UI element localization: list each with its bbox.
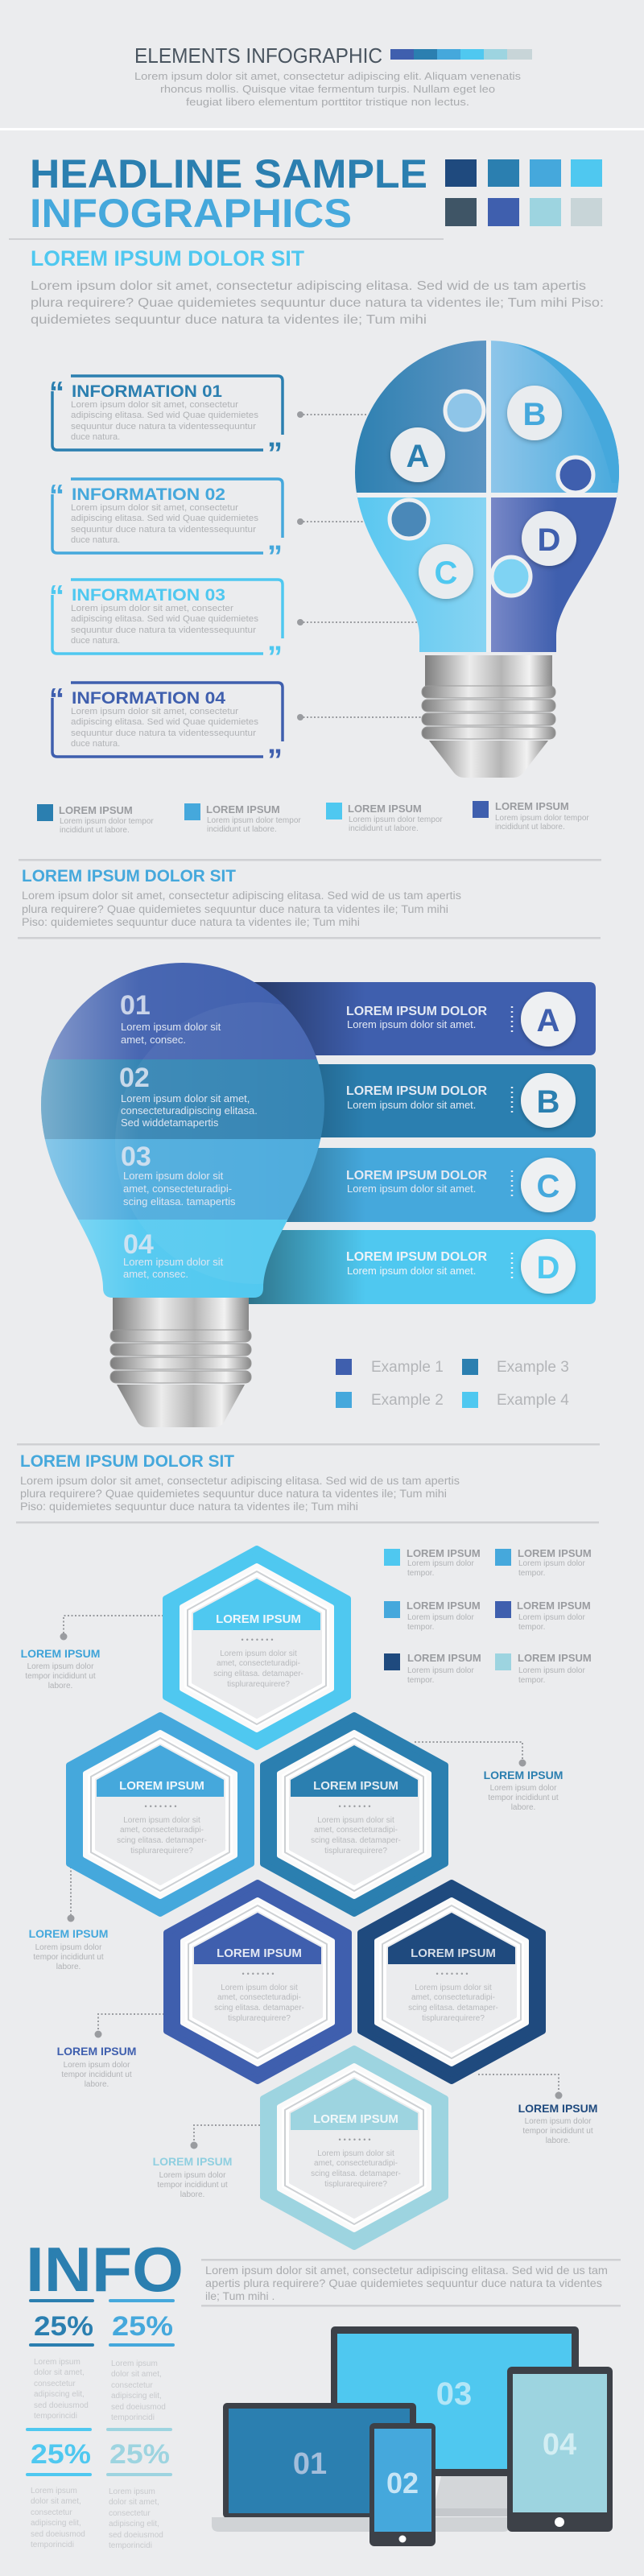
bulb numbers and text: amet, consecteturadipi-	[123, 1183, 232, 1195]
hex side labels: labore.	[180, 2190, 204, 2199]
stat 3: dolor sit amet,	[31, 2497, 81, 2506]
hexagon legend grid: Lorem ipsum dolor	[407, 1613, 474, 1622]
devices illustration	[212, 2326, 613, 2546]
header subtext: Lorem ipsum dolor sit amet, consectetur adipiscing elit. Aliquam venenatis	[134, 70, 522, 82]
hex side labels: LOREM IPSUM	[29, 1927, 108, 1940]
hexagon legend grid: tempor.	[518, 1676, 545, 1685]
legend: examples	[336, 1359, 569, 1409]
legend row 1: LOREM IPSUM	[348, 803, 422, 815]
bulb numbers and text: Sed widdetamapertis	[121, 1117, 219, 1129]
bar C: LOREM IPSUM DOLOR	[346, 1169, 488, 1183]
bulb numbers and text: amet, consec.	[121, 1034, 186, 1046]
info box 04: “	[49, 683, 64, 716]
hexagon 6: LOREM IPSUM	[313, 2112, 398, 2126]
header subtext: rhoncus mollis. Quisque vitae fermentum turpis. Nullam eget leo	[160, 83, 495, 95]
info box 02: duce natura.	[71, 535, 120, 545]
info box 04: ”	[267, 744, 283, 778]
hex side labels: tempor incididunt ut	[488, 1794, 559, 1802]
info box 02: adipiscing elitasa. Sed wid Quae quidemietes	[71, 514, 259, 523]
info paragraph: ile; Tum mihi .	[205, 2289, 275, 2302]
stat 4: dolor sit amet,	[109, 2498, 159, 2507]
layered lightbulb	[41, 963, 324, 1427]
stat 1: consectetur	[34, 2380, 76, 2388]
main headline: INFOGRAPHICS	[30, 191, 352, 236]
hex side labels: Lorem ipsum dolor	[64, 2061, 130, 2070]
hexagon 1: scing elitasa. detamaper-	[213, 1670, 303, 1678]
info box 01: INFORMATION 01	[72, 382, 222, 401]
legend: examples: Example 1	[371, 1359, 444, 1376]
stat 2: 25%	[112, 2311, 173, 2342]
hexagon 5: amet, consecteturadipi-	[411, 1993, 495, 2002]
hex side labels: LOREM IPSUM	[153, 2155, 232, 2168]
stat 3: sed doeiusmod	[31, 2530, 85, 2539]
info box 02: ”	[267, 540, 283, 574]
hexagon legend grid: LOREM IPSUM	[407, 1547, 481, 1559]
info box 01: duce natura.	[71, 432, 120, 442]
phone: 02	[386, 2467, 419, 2500]
hexagon legend grid: tempor.	[518, 1623, 545, 1632]
hex side labels: labore.	[85, 2080, 109, 2089]
hexagon 5: Lorem ipsum dolor sit	[415, 1984, 492, 1992]
hexagon 6: •••••••	[338, 2136, 374, 2144]
legend row 1: Lorem ipsum dolor tempor	[207, 816, 301, 825]
hex side labels: tempor incididunt ut	[25, 1672, 96, 1681]
hexagon 5: scing elitasa. detamaper-	[408, 2004, 498, 2013]
bulb numbers and text: 01	[120, 990, 151, 1021]
info paragraph	[201, 2259, 621, 2307]
hexagon 3: tisplurarequirere?	[324, 1847, 387, 1856]
section 1 paragraph: Lorem ipsum dolor sit amet, consectetur adipiscing elitasa. Sed wid de us tam apertis	[31, 279, 586, 293]
stat 4: sed doeiusmod	[109, 2531, 163, 2540]
stat 1: 25%	[34, 2311, 93, 2342]
hexagon 3: scing elitasa. detamaper-	[311, 1836, 401, 1845]
legend row 1: incididunt ut labore.	[349, 824, 419, 833]
hex side labels: Lorem ipsum dolor	[525, 2117, 592, 2126]
legend row 1: incididunt ut labore.	[60, 826, 130, 835]
section 2 paragraph	[22, 890, 461, 928]
hex side labels	[21, 1647, 597, 2199]
info paragraph: Lorem ipsum dolor sit amet, consectetur adipiscing elitasa. Sed wid de us tam	[205, 2264, 608, 2277]
metal base	[422, 655, 555, 778]
section 1 heading: LOREM IPSUM DOLOR SIT	[31, 246, 304, 270]
info box 02: “	[49, 479, 64, 513]
tablet: 04	[543, 2428, 576, 2462]
info box 01: Lorem ipsum dolor sit amet, consectetur	[71, 400, 238, 410]
puzzle lightbulb: B	[523, 397, 546, 432]
hexagon 6: tisplurarequirere?	[324, 2180, 387, 2189]
info box 03: Lorem ipsum dolor sit amet, consecter	[71, 604, 233, 613]
puzzle lightbulb	[346, 330, 628, 778]
hexagon legend grid	[384, 1547, 592, 1685]
info box 03: ”	[267, 641, 283, 675]
hexagon 6: Lorem ipsum dolor sit	[317, 2149, 394, 2158]
section 2 paragraph: Piso: quidemietes sequuntur duce natura ta videntes ile; Tum mihi	[22, 916, 360, 928]
bar B: LOREM IPSUM DOLOR	[346, 1084, 488, 1098]
hexagon legend grid: Lorem ipsum dolor	[407, 1559, 474, 1568]
hexagon 4: Lorem ipsum dolor sit	[221, 1984, 298, 1992]
info box 02: sequuntur duce natura ta videntessequuntur	[71, 525, 256, 535]
info box 03: sequuntur duce natura ta videntessequuntur	[71, 625, 256, 635]
stat 4	[106, 2428, 172, 2550]
bar D	[242, 1230, 596, 1304]
hexagon legend grid: Lorem ipsum dolor	[407, 1666, 474, 1675]
hexagon legend grid: tempor.	[407, 1569, 434, 1578]
info box 04: sequuntur duce natura ta videntessequuntur	[71, 729, 256, 738]
info box 03: duce natura.	[71, 636, 120, 646]
info box 03: INFORMATION 03	[72, 586, 225, 605]
stat 2: Lorem ipsum	[111, 2359, 158, 2368]
monitor	[331, 2326, 579, 2516]
bar A: Lorem ipsum dolor sit amet.	[347, 1018, 476, 1030]
bulb numbers and text: 04	[123, 1229, 154, 1260]
info box 04: INFORMATION 04	[72, 689, 225, 708]
section 3 paragraph	[20, 1475, 460, 1513]
info box 01: sequuntur duce natura ta videntessequuntur	[71, 422, 256, 431]
section 2 paragraph: plura requirere? Quae quidemietes sequuntur duce natura ta videntes ile; Tum mihi	[22, 903, 448, 915]
bar D: Lorem ipsum dolor sit amet.	[347, 1265, 476, 1277]
legend: examples: Example 3	[497, 1359, 569, 1376]
stat 4: temporincidi	[109, 2541, 152, 2550]
hexagon 4: LOREM IPSUM	[217, 1946, 302, 1960]
section 2 paragraph: Lorem ipsum dolor sit amet, consectetur adipiscing elitasa. Sed wid de us tam apertis	[22, 890, 461, 902]
section 3 paragraph: Piso: quidemietes sequuntur duce natura ta videntes ile; Tum mihi	[20, 1501, 358, 1513]
hexagon legend grid: LOREM IPSUM	[517, 1600, 591, 1612]
hexagon 4	[167, 1883, 349, 2081]
bulb numbers and text: 03	[121, 1141, 151, 1172]
hexagon 2: scing elitasa. detamaper-	[117, 1836, 207, 1845]
info box 01: “	[49, 376, 64, 410]
hexagon 3: Lorem ipsum dolor sit	[317, 1816, 394, 1825]
info box 04: Lorem ipsum dolor sit amet, consectetur	[71, 707, 238, 716]
info box 01: adipiscing elitasa. Sed wid Quae quidemietes	[71, 411, 259, 420]
info box 04	[49, 683, 283, 778]
header: elements infographic: ELEMENTS INFOGRAPHIC	[134, 43, 382, 68]
section 2 heading: LOREM IPSUM DOLOR SIT	[22, 867, 236, 886]
hex side labels: labore.	[48, 1682, 72, 1690]
section 3 heading: LOREM IPSUM DOLOR SIT	[20, 1452, 234, 1471]
stat 4: Lorem ipsum	[109, 2487, 155, 2496]
bulb numbers and text: Lorem ipsum dolor sit	[123, 1256, 224, 1268]
stat 2: dolor sit amet,	[111, 2370, 162, 2379]
bar C: C	[537, 1169, 559, 1204]
puzzle lightbulb: A	[407, 439, 429, 474]
bar D: LOREM IPSUM DOLOR	[346, 1250, 488, 1264]
bar B: B	[537, 1084, 559, 1120]
hexagon 5: tisplurarequirere?	[422, 2014, 485, 2023]
stat 3: temporincidi	[31, 2541, 74, 2549]
INFO title: INFO	[26, 2234, 184, 2305]
piece D	[489, 495, 625, 656]
info box 01	[49, 376, 283, 471]
hexagon 4: scing elitasa. detamaper-	[214, 2004, 304, 2013]
bulb numbers and text: amet, consec.	[123, 1268, 188, 1280]
bar D: D	[537, 1250, 559, 1286]
hexagon 1: •••••••	[241, 1636, 276, 1644]
bar B: Lorem ipsum dolor sit amet.	[347, 1099, 476, 1111]
info paragraph: apertis plura requirere? Quae quidemietes sequuntur duce natura ta videntes	[205, 2277, 602, 2289]
color palette squares	[445, 159, 602, 226]
hexagon 4: tisplurarequirere?	[228, 2014, 291, 2023]
hex side labels: LOREM IPSUM	[484, 1769, 563, 1781]
stat 3: Lorem ipsum	[31, 2487, 77, 2496]
hexagon 2: Lorem ipsum dolor sit	[123, 1816, 200, 1825]
laptop: 01	[293, 2447, 327, 2481]
bulb numbers and text: 02	[119, 1063, 150, 1093]
stat 2: adipiscing elit,	[111, 2392, 162, 2401]
hexagon 6: amet, consecteturadipi-	[314, 2159, 398, 2168]
stat 3: adipiscing elit,	[31, 2519, 81, 2528]
stat 1	[29, 2299, 94, 2421]
bulb numbers and text	[119, 990, 258, 1280]
hexagon legend grid: tempor.	[518, 1569, 545, 1578]
hexagon 2: amet, consecteturadipi-	[120, 1826, 204, 1835]
info box 01: ”	[267, 437, 283, 471]
hexagon legend grid: tempor.	[407, 1676, 434, 1685]
stat 3: 25%	[31, 2439, 91, 2470]
hex side labels: tempor incididunt ut	[61, 2070, 132, 2079]
hexagon 3: •••••••	[338, 1802, 374, 1810]
hexagon legend grid: LOREM IPSUM	[407, 1600, 481, 1612]
knobs	[445, 391, 484, 430]
hexagon 5	[361, 1883, 543, 2081]
laptop	[212, 2403, 510, 2532]
stat 2	[109, 2299, 175, 2422]
color strip	[390, 49, 532, 60]
info box 03	[49, 580, 283, 675]
hex side labels: Lorem ipsum dolor	[159, 2171, 226, 2180]
hexagon 1: Lorem ipsum dolor sit	[220, 1649, 297, 1658]
stat 1: sed doeiusmod	[34, 2401, 89, 2410]
hexagon 4: •••••••	[242, 1970, 277, 1978]
hex side labels: labore.	[511, 1803, 535, 1812]
info box 02	[49, 479, 283, 574]
hexagon 1: LOREM IPSUM	[216, 1612, 301, 1626]
hexagon legend grid: Lorem ipsum dolor	[518, 1613, 585, 1622]
stat 3	[26, 2428, 92, 2549]
section 3 paragraph: plura requirere? Quae quidemietes sequuntur duce natura ta videntes ile; Tum mihi	[20, 1488, 447, 1500]
legend row 1: Lorem ipsum dolor tempor	[349, 815, 443, 824]
hex side labels: Lorem ipsum dolor	[35, 1943, 102, 1952]
hexagon 3: LOREM IPSUM	[313, 1779, 398, 1793]
hexagon legend grid: Lorem ipsum dolor	[518, 1559, 585, 1568]
hexagon 5: •••••••	[436, 1970, 471, 1978]
stat 1: temporincidi	[34, 2412, 77, 2421]
bar B	[242, 1064, 596, 1137]
hex side labels: labore.	[546, 2136, 570, 2145]
legend row 1: LOREM IPSUM	[206, 803, 280, 815]
section 1 paragraph: quidemietes sequuntur duce natura ta videntes ile; Tum mihi	[31, 313, 427, 327]
hexagon 1: amet, consecteturadipi-	[217, 1659, 300, 1668]
info box 04: adipiscing elitasa. Sed wid Quae quidemietes	[71, 717, 259, 727]
legend: examples: Example 2	[371, 1392, 444, 1409]
stat 4: adipiscing elit,	[109, 2520, 159, 2529]
stat 2: temporincidi	[111, 2413, 155, 2422]
connectors to bulb	[297, 411, 423, 720]
hexagon legend grid: LOREM IPSUM	[518, 1652, 592, 1664]
hex side labels: Lorem ipsum dolor	[490, 1784, 557, 1793]
hex connectors	[64, 1616, 559, 2145]
hexagon 3: amet, consecteturadipi-	[314, 1826, 398, 1835]
hexagon 4: amet, consecteturadipi-	[217, 1993, 301, 2002]
info box 02: Lorem ipsum dolor sit amet, consectetur	[71, 503, 238, 513]
hexagon 2: •••••••	[144, 1802, 180, 1810]
bulb numbers and text: Lorem ipsum dolor sit	[123, 1170, 224, 1182]
puzzle lightbulb: D	[538, 522, 560, 558]
hexagon 6	[263, 2049, 445, 2247]
hexagon legend grid: Lorem ipsum dolor	[518, 1666, 585, 1675]
bar A: LOREM IPSUM DOLOR	[346, 1005, 488, 1018]
bar C	[242, 1148, 596, 1222]
bulb numbers and text: Lorem ipsum dolor sit amet,	[121, 1092, 250, 1104]
hexagon 1: tisplurarequirere?	[227, 1680, 290, 1689]
stat 4: consectetur	[109, 2509, 151, 2518]
stat 1: adipiscing elit,	[34, 2390, 85, 2399]
bars A-D	[242, 982, 596, 1304]
hexagon 1	[166, 1549, 348, 1747]
info box 03: adipiscing elitasa. Sed wid Quae quidemietes	[71, 614, 259, 624]
hex side labels: tempor incididunt ut	[157, 2181, 228, 2190]
header subtext: feugiat libero elementum porttitor tristique non lectus.	[186, 96, 469, 108]
info box 02: INFORMATION 02	[72, 485, 225, 504]
hex side labels: tempor incididunt ut	[522, 2127, 593, 2136]
hex side labels: Lorem ipsum dolor	[27, 1662, 94, 1671]
bar A: A	[537, 1003, 559, 1038]
info box 03: “	[49, 580, 64, 613]
stat 1: Lorem ipsum	[34, 2358, 80, 2367]
hexagon 5: LOREM IPSUM	[411, 1946, 496, 1960]
stat 2: consectetur	[111, 2381, 153, 2390]
hexagon legend grid: tempor.	[407, 1623, 434, 1632]
legend row 1: incididunt ut labore.	[495, 823, 565, 832]
hex side labels: LOREM IPSUM	[518, 2102, 597, 2115]
hexagon legend grid: LOREM IPSUM	[407, 1652, 481, 1664]
main headline: HEADLINE SAMPLE	[30, 151, 427, 196]
bulb numbers and text: scing elitasa. tamapertis	[123, 1195, 236, 1208]
section 1 paragraph	[31, 279, 604, 327]
hexagon 6: scing elitasa. detamaper-	[311, 2169, 401, 2178]
bar C: Lorem ipsum dolor sit amet.	[347, 1183, 476, 1195]
legend: examples: Example 4	[497, 1392, 569, 1409]
metal base 2	[110, 1298, 251, 1427]
hexagon legend grid: LOREM IPSUM	[518, 1547, 592, 1559]
legend row 1: LOREM IPSUM	[59, 804, 133, 816]
stat 2: sed doeiusmod	[111, 2403, 166, 2412]
stat 1: dolor sit amet,	[34, 2368, 85, 2377]
hexagon 2: tisplurarequirere?	[130, 1847, 193, 1856]
hex side labels: tempor incididunt ut	[33, 1953, 104, 1962]
piece B	[489, 341, 619, 495]
piece A	[355, 341, 489, 495]
bulb numbers and text: consecteturadipiscing elitasa.	[121, 1104, 258, 1117]
bulb numbers and text: Lorem ipsum dolor sit	[121, 1021, 221, 1033]
letter circles	[390, 386, 576, 599]
hex side labels: LOREM IPSUM	[57, 2045, 136, 2058]
main headline	[30, 151, 427, 236]
stat 3: consectetur	[31, 2508, 72, 2517]
header subtext	[134, 70, 522, 108]
monitor: 03	[436, 2376, 472, 2412]
legend row 1	[37, 800, 589, 835]
hexagon 2	[69, 1715, 251, 1913]
info box 04: duce natura.	[71, 739, 120, 749]
hex side labels: LOREM IPSUM	[21, 1647, 100, 1660]
hex side labels: labore.	[56, 1963, 80, 1971]
stat 4: 25%	[109, 2439, 170, 2470]
bar A	[242, 982, 596, 1055]
tablet	[507, 2367, 613, 2532]
legend row 1: Lorem ipsum dolor tempor	[60, 817, 154, 826]
section 1 paragraph: plura requirere? Quae quidemietes sequuntur duce natura ta videntes ile; Tum mihi Piso:	[31, 296, 604, 310]
legend row 1: Lorem ipsum dolor tempor	[495, 814, 589, 823]
phone	[369, 2423, 436, 2546]
legend row 1: incididunt ut labore.	[207, 825, 277, 834]
hexagon 2: LOREM IPSUM	[119, 1779, 204, 1793]
hexagon 3	[263, 1715, 445, 1913]
piece C	[357, 496, 486, 652]
header: elements infographic	[134, 43, 532, 68]
legend row 1: LOREM IPSUM	[495, 800, 569, 812]
section 3 paragraph: Lorem ipsum dolor sit amet, consectetur adipiscing elitasa. Sed wid de us tam apertis	[20, 1475, 460, 1487]
puzzle lightbulb: C	[435, 555, 457, 591]
